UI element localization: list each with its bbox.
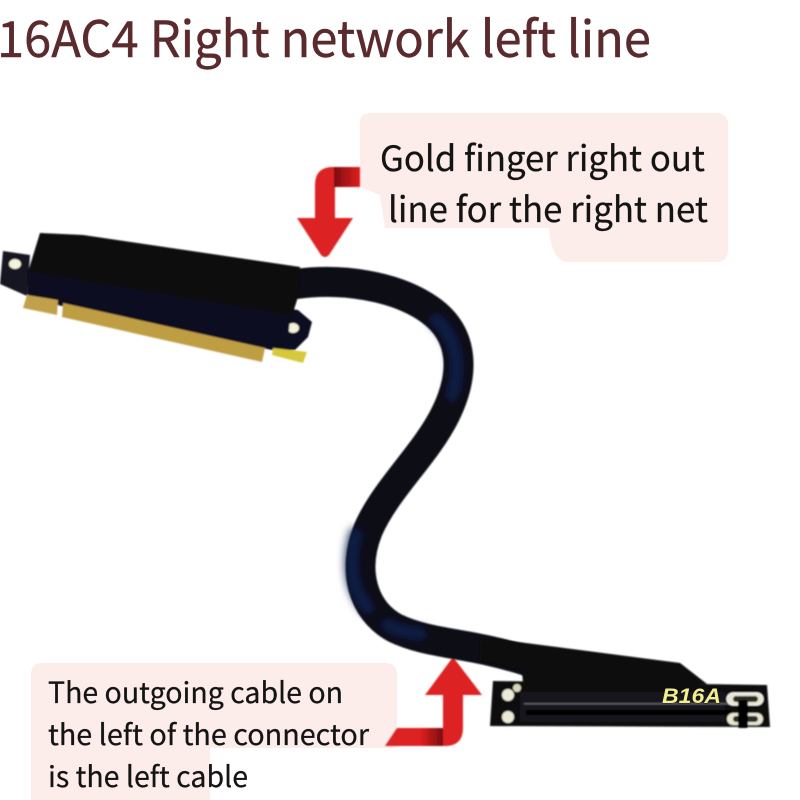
text: top callout: Gold finger right out — [380, 131, 705, 182]
text: bottom callout: the left of the connector — [48, 712, 370, 754]
connector: PCIe slot board (bottom right) — [480, 640, 770, 728]
slot PCB — [490, 681, 770, 727]
arrow: pointing up to left cable — [385, 657, 482, 746]
text: bottom callout: is the left cable — [48, 754, 248, 796]
flat cable wrap — [480, 640, 707, 684]
mounting holes — [9, 259, 21, 269]
title: 16AC4 Right network left line — [0, 0, 651, 72]
cable: blue braid highlights — [352, 320, 457, 634]
watermark: B16A: B16A — [662, 685, 721, 708]
text: top callout — [380, 131, 708, 233]
text: bottom callout: The outgoing cable on — [48, 670, 343, 712]
connector: gold finger card (top left) — [0, 233, 312, 363]
panel: bottom callout background — [31, 663, 397, 800]
PCB left tab — [0, 251, 30, 296]
text: bottom callout — [48, 670, 370, 796]
gold contacts — [23, 295, 58, 315]
cable: braided sleeve between connectors — [296, 282, 530, 662]
PCB body — [27, 270, 312, 350]
arrow: pointing down to gold finger cable — [297, 167, 360, 257]
mounting holes — [502, 689, 514, 701]
panel: top callout background — [360, 113, 728, 262]
black flat cable wrap — [28, 233, 300, 322]
text: top callout: line for the right net — [388, 182, 708, 233]
slots — [727, 693, 763, 705]
slot body — [520, 692, 725, 722]
